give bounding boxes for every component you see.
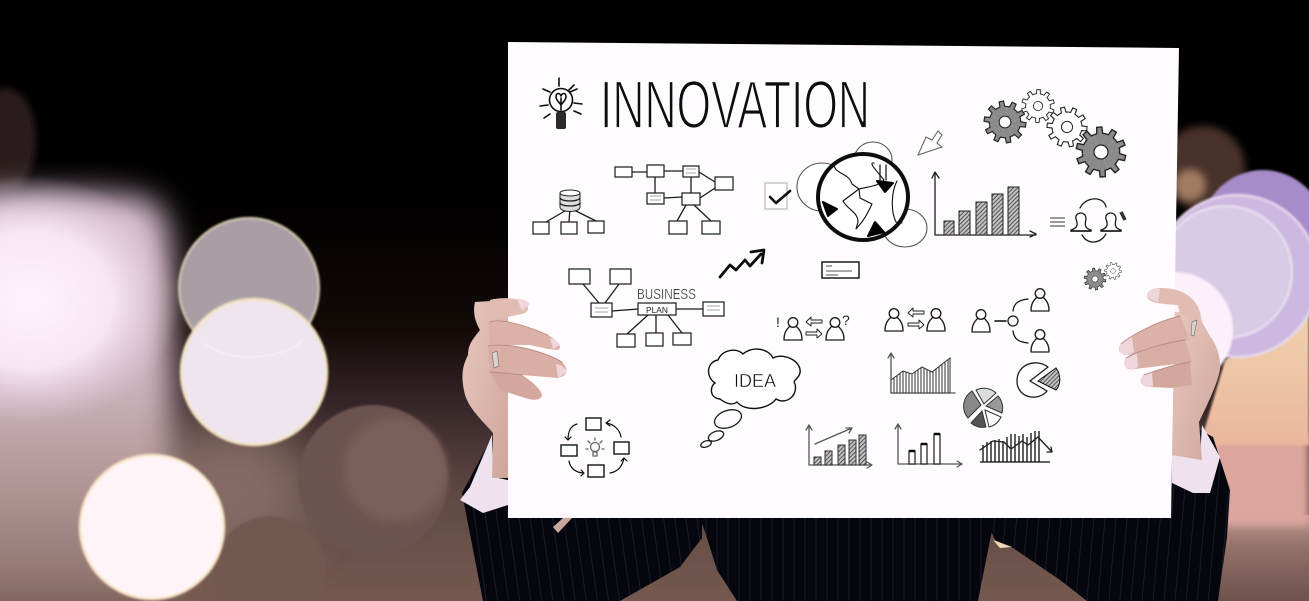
cycle diagram with bulb [561, 418, 629, 477]
icon: checkbox [765, 183, 790, 209]
right hand fingers over sign [1119, 288, 1201, 388]
line and bars chart [980, 431, 1052, 462]
thought cloud: IDEA [700, 349, 800, 449]
left hand wrist and palm [462, 300, 508, 478]
right hand wrist and palm [1172, 312, 1220, 460]
people exchange with symbols: ? [842, 312, 850, 328]
label: PLAN: PLAN [646, 305, 668, 315]
growth bar chart [806, 425, 872, 468]
flowchart: process [615, 165, 733, 234]
sign drawings [533, 67, 1131, 477]
person to two people [972, 289, 1049, 352]
people exchange [885, 308, 945, 331]
left shirt cuff [460, 435, 508, 513]
people exchange with symbols: ! [776, 314, 780, 330]
icon: outline arrow [918, 131, 942, 155]
label: BUSINESS: BUSINESS [637, 286, 696, 303]
thought cloud: IDEA: IDEA [734, 371, 776, 391]
icon: cheque [822, 262, 859, 278]
bar chart [932, 172, 1036, 237]
icon: rising arrow [720, 250, 764, 277]
people exchange with symbols [776, 312, 850, 340]
right shirt cuff [1172, 425, 1220, 493]
icon: large gears [981, 85, 1131, 183]
area chart [888, 353, 955, 393]
icon: small gears [1082, 262, 1122, 292]
flowchart: database [533, 190, 604, 234]
title: INNOVATION: INNOVATION [600, 67, 870, 143]
globe with speech bubbles [797, 142, 927, 247]
left hand fingers over sign [488, 298, 567, 400]
business plan diagram [569, 269, 724, 347]
person: suit jacket [462, 430, 1230, 601]
icon: light bulb [540, 78, 582, 129]
whiteboard sign [508, 42, 1179, 518]
icon: stamps cycle [1050, 199, 1125, 242]
column chart [895, 424, 962, 467]
exploded pie chart [964, 388, 1003, 427]
pie chart with slice [1017, 363, 1060, 397]
